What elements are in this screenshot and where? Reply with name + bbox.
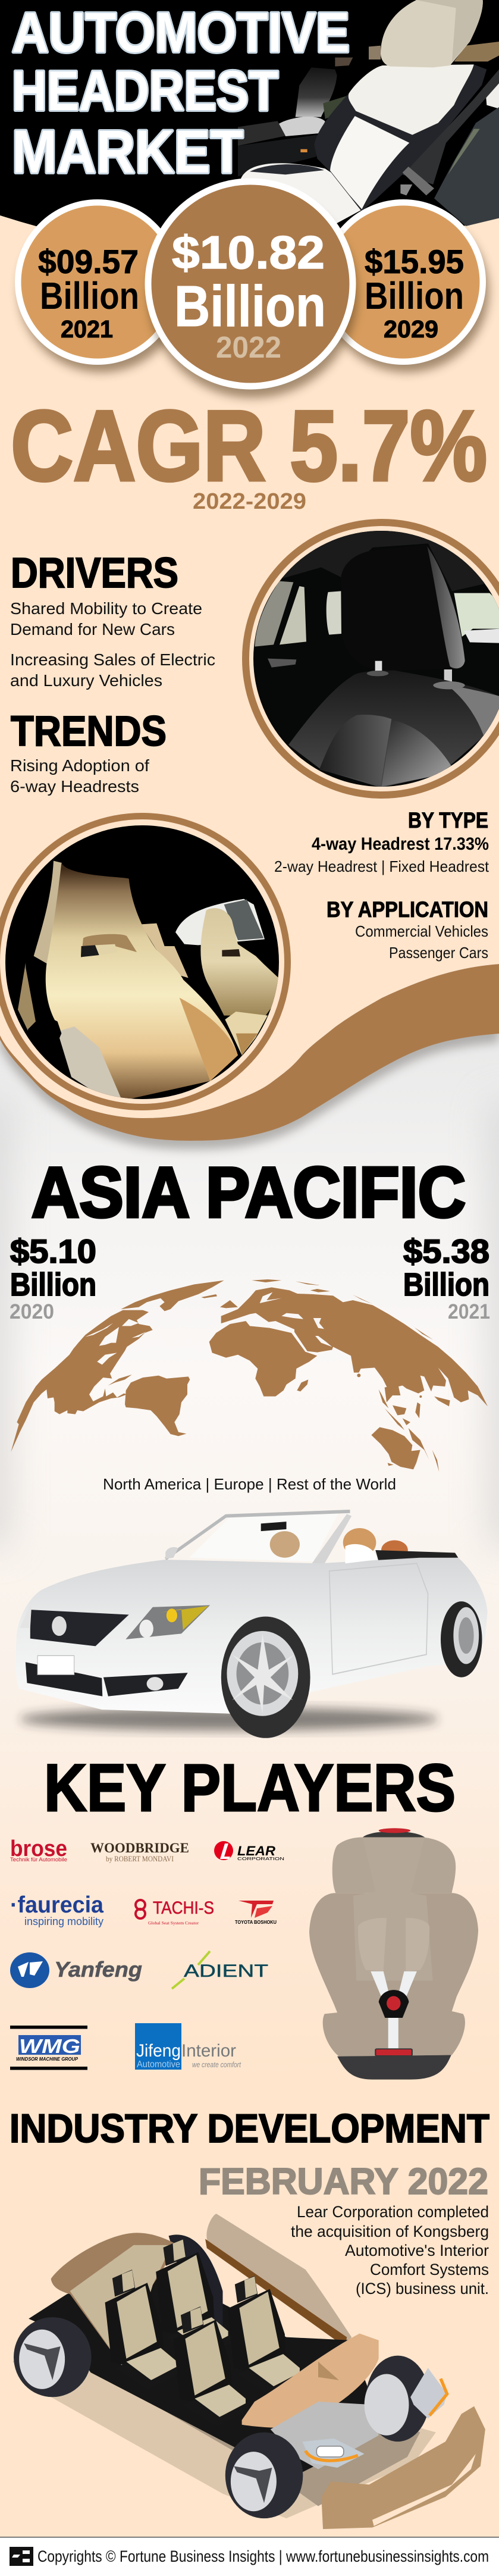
logo: brose: Technik für Automobile (10, 1857, 67, 1863)
development description: the acquisition of Kongsberg (291, 2223, 489, 2240)
development date: FEBRUARY 2022 (199, 2161, 488, 2202)
logo: jifeng interior: Automotive (137, 2059, 180, 2070)
africa, eurasia, oceania (209, 1279, 488, 1472)
other regions: North America | Europe | Rest of the World (103, 1475, 396, 1493)
panel: segments by type (274, 808, 489, 875)
photo: white convertible car (16, 1511, 488, 1738)
panel: header (0, 0, 499, 256)
cream above swoosh (0, 946, 499, 1118)
driver 1: Demand for New Cars (10, 620, 175, 638)
title line 1: AUTOMOTIVE (12, 1, 350, 64)
logo: yanfeng: Yanfeng (54, 1957, 142, 1982)
panel: logos (10, 1836, 284, 2070)
photo: car seat (238, 0, 499, 238)
logo: wmg: WMG (19, 2035, 80, 2057)
circle 2029: 2029 (384, 315, 438, 343)
trend text: 6-way Headrests (10, 777, 139, 796)
driver 2 (10, 650, 215, 690)
circle 2021 (15, 199, 183, 373)
logo: brose: brose (10, 1836, 67, 1861)
logo: woodbridge (90, 1841, 189, 1863)
logo: lear: CORPORATION (237, 1857, 284, 1861)
logo: jifeng interior: Jifeng (136, 2041, 181, 2061)
development description: Automotive's Interior (345, 2242, 489, 2259)
stat: 2020: 2020 (10, 1300, 54, 1323)
panel: swoosh (0, 946, 499, 1150)
by type others: 2-way Headrest | Fixed Headrest (274, 857, 489, 875)
logo: tachi-s: Global Seat System Creator (148, 1921, 199, 1926)
circle 2029 (321, 199, 489, 373)
title line 3: MARKET (12, 118, 243, 186)
panel: segments by application (327, 897, 488, 962)
development description: (ICS) business unit. (356, 2280, 489, 2298)
trend text (10, 756, 149, 796)
stat: 2021: Billion (403, 1267, 489, 1303)
circle 2021: $09.57 (38, 243, 139, 280)
stat: 2021 (403, 1232, 490, 1323)
circle 2021: Billion (40, 274, 139, 317)
logo: toyota boshoku (235, 1901, 277, 1925)
circle 2022: Billion (174, 274, 326, 339)
circle 2021: 2021 (61, 315, 113, 343)
development description: Lear Corporation completed (297, 2203, 489, 2221)
panel: footer (0, 2537, 499, 2576)
logo: woodbridge: by ROBERT MONDAVI (106, 1854, 174, 1863)
logo: tachi-s: TACHI-S (153, 1898, 214, 1918)
application 1: Commercial Vehicles (355, 922, 488, 940)
logo: jifeng interior: we create comfort (192, 2060, 241, 2069)
car chassis illustration (12, 2214, 485, 2529)
header black shape (0, 0, 499, 256)
stat: 2020: Billion (10, 1267, 96, 1303)
by type heading: BY TYPE (408, 808, 488, 832)
logo: lear: LEAR (237, 1843, 275, 1858)
circle 2029: $15.95 (365, 243, 464, 280)
logo: tachi-s (136, 1898, 214, 1926)
logo: adient: ADIENT (184, 1961, 268, 1981)
circle 2029: Billion (365, 274, 464, 317)
logo: faurecia: ·faurecia (10, 1892, 103, 1918)
trend text: Rising Adoption of (10, 756, 149, 775)
key players heading: KEY PLAYERS (44, 1751, 456, 1825)
circle 2022: $10.82 (172, 226, 325, 278)
application 2: Passenger Cars (389, 944, 488, 962)
panel: market size circles (15, 179, 489, 398)
stat: 2020 (10, 1232, 96, 1323)
drivers heading: DRIVERS (11, 550, 178, 597)
logo: toyota boshoku: TOYOTA BOSHOKU (235, 1920, 277, 1925)
logo: faurecia: inspiring mobility (24, 1915, 103, 1927)
logo: wmg (10, 2026, 87, 2070)
logo: lear (214, 1841, 284, 1861)
logo: wmg: WINDSOR MACHINE GROUP (16, 2057, 79, 2062)
icon: fortune business insights logo (10, 2547, 33, 2566)
stat: 2020: $5.10 (10, 1232, 96, 1270)
driver 1: Shared Mobility to Create (10, 599, 202, 618)
trends heading: TRENDS (11, 708, 167, 755)
logo: jifeng interior (135, 2023, 241, 2070)
development description: Comfort Systems (370, 2261, 489, 2278)
circle 2022 (145, 179, 357, 398)
americas (11, 1281, 224, 1452)
panel: drivers and trends (10, 550, 215, 796)
circle 2022: 2022 (216, 330, 281, 364)
driver 2: Increasing Sales of Electric (10, 650, 215, 669)
world map (11, 1279, 488, 1472)
swoosh band (0, 964, 499, 1141)
CAGR period: 2022-2029 (193, 489, 306, 514)
panel: title (12, 1, 350, 186)
logo: woodbridge: WOODBRIDGE (90, 1841, 189, 1855)
driver 1 (10, 599, 202, 638)
lower light background (0, 952, 499, 2083)
logo: adient (172, 1951, 268, 1989)
development description (291, 2203, 489, 2298)
photo: beige seats (0, 816, 288, 1107)
title line 2: HEADREST (12, 60, 278, 123)
region heading: ASIA PACIFIC (32, 1153, 466, 1232)
stat: 2021: 2021 (448, 1300, 490, 1323)
photo: black leather headrest (238, 522, 499, 797)
logo: yanfeng (10, 1952, 142, 1988)
stat: 2021: $5.38 (403, 1232, 489, 1270)
logo: jifeng interior: Interior (181, 2041, 236, 2061)
child seat illustration (309, 1828, 478, 2080)
driver 2: and Luxury Vehicles (10, 671, 162, 690)
